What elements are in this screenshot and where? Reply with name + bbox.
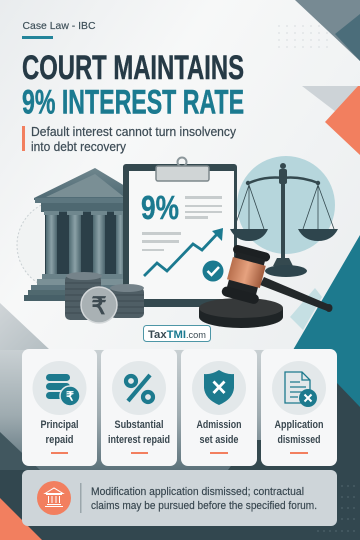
icon: shield with x	[204, 370, 234, 405]
icon: orange court	[37, 481, 71, 515]
illustration: light circle behind bank	[17, 200, 107, 290]
subtitle: Default interest cannot turn insolvency	[31, 125, 237, 139]
card: principal repaid	[22, 349, 97, 466]
illustration: rupee coin stacks	[65, 272, 144, 323]
check badge	[202, 260, 224, 282]
icon: percent	[126, 375, 153, 402]
subtitle: into debt recovery	[31, 140, 127, 154]
card: application dismissed: Application	[274, 419, 324, 431]
card: admission set aside	[181, 349, 257, 466]
card: admission set aside: set aside	[200, 434, 238, 446]
card: application dismissed: dismissed	[278, 434, 320, 446]
icon: document with x	[285, 372, 317, 407]
card: admission set aside: Admission	[196, 419, 242, 431]
9% figure: 9%	[141, 189, 179, 226]
rupee coin: ₹	[91, 293, 107, 320]
title: 9% INTEREST RATE	[22, 84, 244, 122]
callout: conclusion	[22, 470, 337, 526]
document lines	[142, 196, 222, 251]
eyebrow: Case Law - IBC	[22, 20, 96, 39]
TaxTMI logo badge	[144, 326, 210, 342]
card: principal repaid: Principal	[40, 419, 78, 431]
subtitle	[22, 125, 237, 154]
illustration: bank building	[24, 168, 128, 301]
callout: conclusion: claims may be pursued before the specified forum.	[91, 500, 317, 512]
decorative dots	[278, 25, 328, 48]
clipboard clip	[156, 158, 209, 181]
trend arrow	[144, 228, 223, 276]
title: COURT MAINTAINS	[22, 49, 244, 87]
card: principal repaid: repaid	[46, 434, 74, 446]
illustration: gavel	[199, 244, 332, 328]
card: application dismissed	[261, 349, 337, 466]
decorative dots bottom right	[317, 485, 355, 532]
title	[22, 49, 244, 122]
card: substantial interest repaid: Substantial	[114, 419, 164, 431]
icon: coins with rupee: ₹	[66, 390, 74, 404]
illustration: scales of justice	[230, 156, 338, 277]
eyebrow: Case Law - IBC: Case Law - IBC	[22, 20, 96, 32]
card: substantial interest repaid: interest repaid	[108, 434, 170, 446]
illustration: clipboard with chart	[123, 158, 237, 307]
callout: conclusion: Modification application dismissed; contractual	[91, 486, 304, 498]
card: substantial interest repaid	[101, 349, 177, 466]
TaxTMI logo badge: TaxTMI.com	[148, 329, 206, 341]
